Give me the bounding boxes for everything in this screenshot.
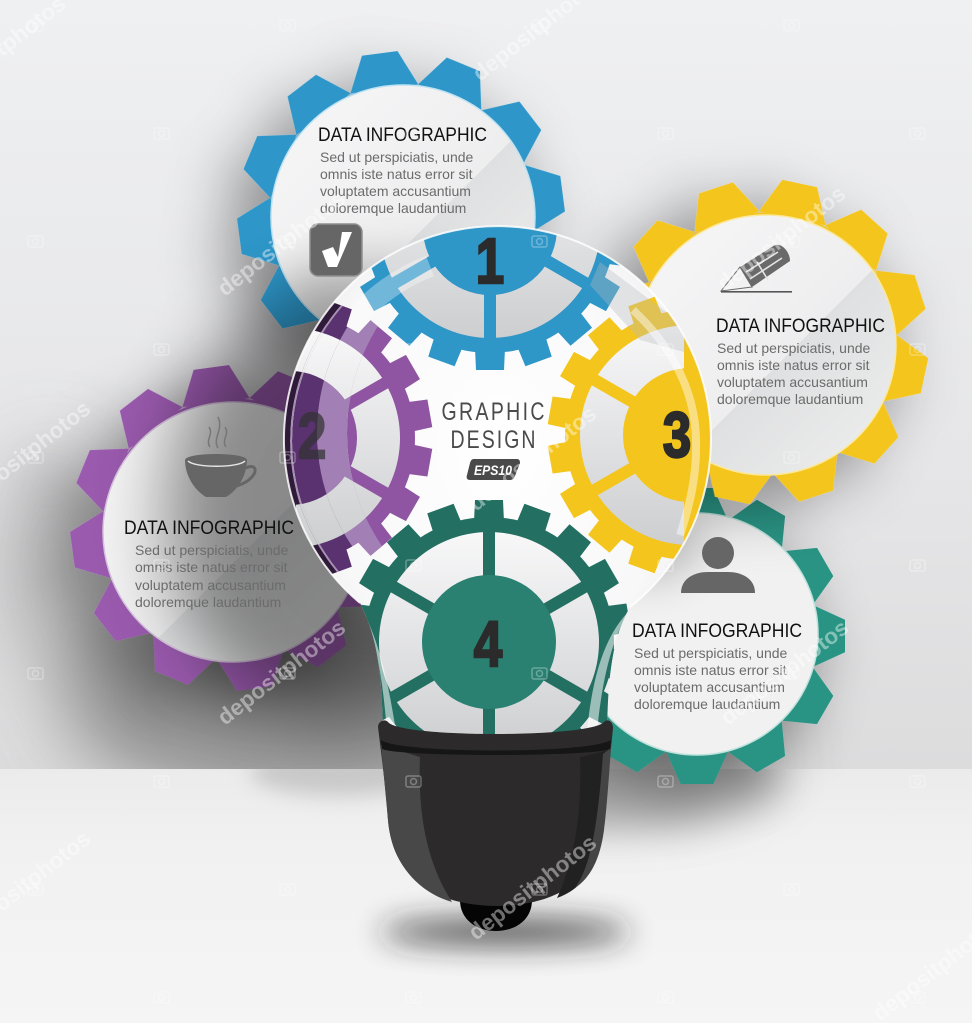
inner gear 2 purple [332, 303, 432, 574]
watermark text: depositphotos [213, 615, 350, 730]
heading: DATA INFOGRAPHIC [318, 125, 487, 146]
inner gear 4 teal [359, 500, 628, 734]
yellow gear [574, 150, 958, 534]
title line 1: GRAPHIC [442, 398, 544, 426]
body text: omnis iste natus error sit [717, 357, 870, 373]
body text: doloremque laudantium [320, 200, 466, 216]
bulb base [378, 720, 613, 906]
body text: omnis iste natus error sit [135, 559, 288, 575]
heading: DATA INFOGRAPHIC [632, 621, 802, 642]
base collar [381, 740, 611, 755]
body text: omnis iste natus error sit [320, 166, 473, 182]
inner gear 3 yellow [548, 296, 711, 574]
light bulb [282, 225, 712, 931]
blue swoosh highlight [364, 256, 434, 311]
background floor [0, 769, 972, 1023]
base body [378, 720, 613, 906]
body text: doloremque laudantium [717, 391, 863, 407]
purple panel content [124, 417, 294, 610]
watermark text: depositphotos [464, 830, 601, 945]
watermark text: depositphotos [716, 615, 853, 730]
body text: Sed ut perspiciatis, unde [717, 340, 871, 356]
heading: DATA INFOGRAPHIC [716, 316, 885, 337]
blue gear [218, 32, 584, 398]
base right shade [557, 750, 610, 898]
body text: voluptatem accusantium [717, 374, 868, 390]
body text [135, 542, 289, 610]
purple rim line [284, 303, 341, 574]
inner gear 1 blue [360, 226, 620, 370]
watermark text: depositphotos [713, 181, 850, 296]
title line 2: DESIGN [450, 426, 536, 454]
body text [717, 340, 871, 407]
body text: voluptatem accusantium [135, 577, 286, 593]
glass outline [284, 226, 711, 607]
grey glass upper right [590, 262, 690, 352]
body text: Sed ut perspiciatis, unde [320, 149, 474, 165]
icon: pencil [721, 245, 792, 293]
bulb shadow cast on gears and wall [165, 250, 700, 725]
purple lens band light [317, 304, 382, 572]
yellow gear teeth [574, 150, 958, 534]
body text: Sed ut perspiciatis, unde [634, 645, 788, 661]
background wall [0, 0, 972, 769]
body text: voluptatem accusantium [320, 183, 471, 199]
teal gear [549, 488, 845, 784]
centre title [442, 398, 544, 454]
purple lens band pale [290, 303, 343, 574]
watermark text: depositphotos [213, 186, 350, 301]
purple gear [51, 346, 415, 710]
number 3: 3 [663, 401, 691, 471]
yellow rim crescent [696, 362, 702, 518]
neck reflections [368, 614, 626, 728]
inner numbers [298, 227, 691, 680]
body text [634, 645, 788, 712]
blue gear teeth [218, 32, 584, 398]
body text: doloremque laudantium [135, 594, 281, 610]
heading: DATA INFOGRAPHIC [124, 518, 294, 539]
icon: person [681, 537, 755, 593]
inner gears [284, 226, 711, 734]
yellow panel content [716, 245, 885, 407]
base left highlight [381, 745, 452, 902]
glass body [284, 226, 711, 752]
purple lens band dark [292, 303, 352, 574]
wall shadows [0, 440, 770, 820]
watermark text: depositphotos [464, 401, 601, 516]
number 1: 1 [476, 227, 504, 297]
badge: EPS10: EPS10 [474, 462, 512, 478]
teal panel content [632, 537, 802, 712]
teal gear teeth [549, 488, 845, 784]
bulb base tip [460, 900, 532, 931]
teal gear face [576, 513, 818, 755]
yellow gear face [636, 215, 896, 475]
body text: Sed ut perspiciatis, unde [135, 542, 289, 558]
number 4: 4 [474, 610, 502, 680]
purple gear face [103, 402, 363, 662]
floor shadows [250, 720, 785, 945]
body text: doloremque laudantium [634, 696, 780, 712]
purple gear teeth [51, 346, 415, 710]
badge: EPS10 [467, 459, 520, 480]
body text: voluptatem accusantium [634, 679, 785, 695]
icon: coffee cup [185, 417, 255, 497]
base right edge [575, 748, 611, 888]
body text [320, 149, 474, 216]
blue panel content [310, 125, 487, 276]
icon: check box [310, 224, 362, 276]
pale stripe on yellow [633, 310, 696, 535]
blue gear face [271, 85, 535, 349]
number 2: 2 [298, 402, 326, 472]
body text: omnis iste natus error sit [634, 662, 787, 678]
